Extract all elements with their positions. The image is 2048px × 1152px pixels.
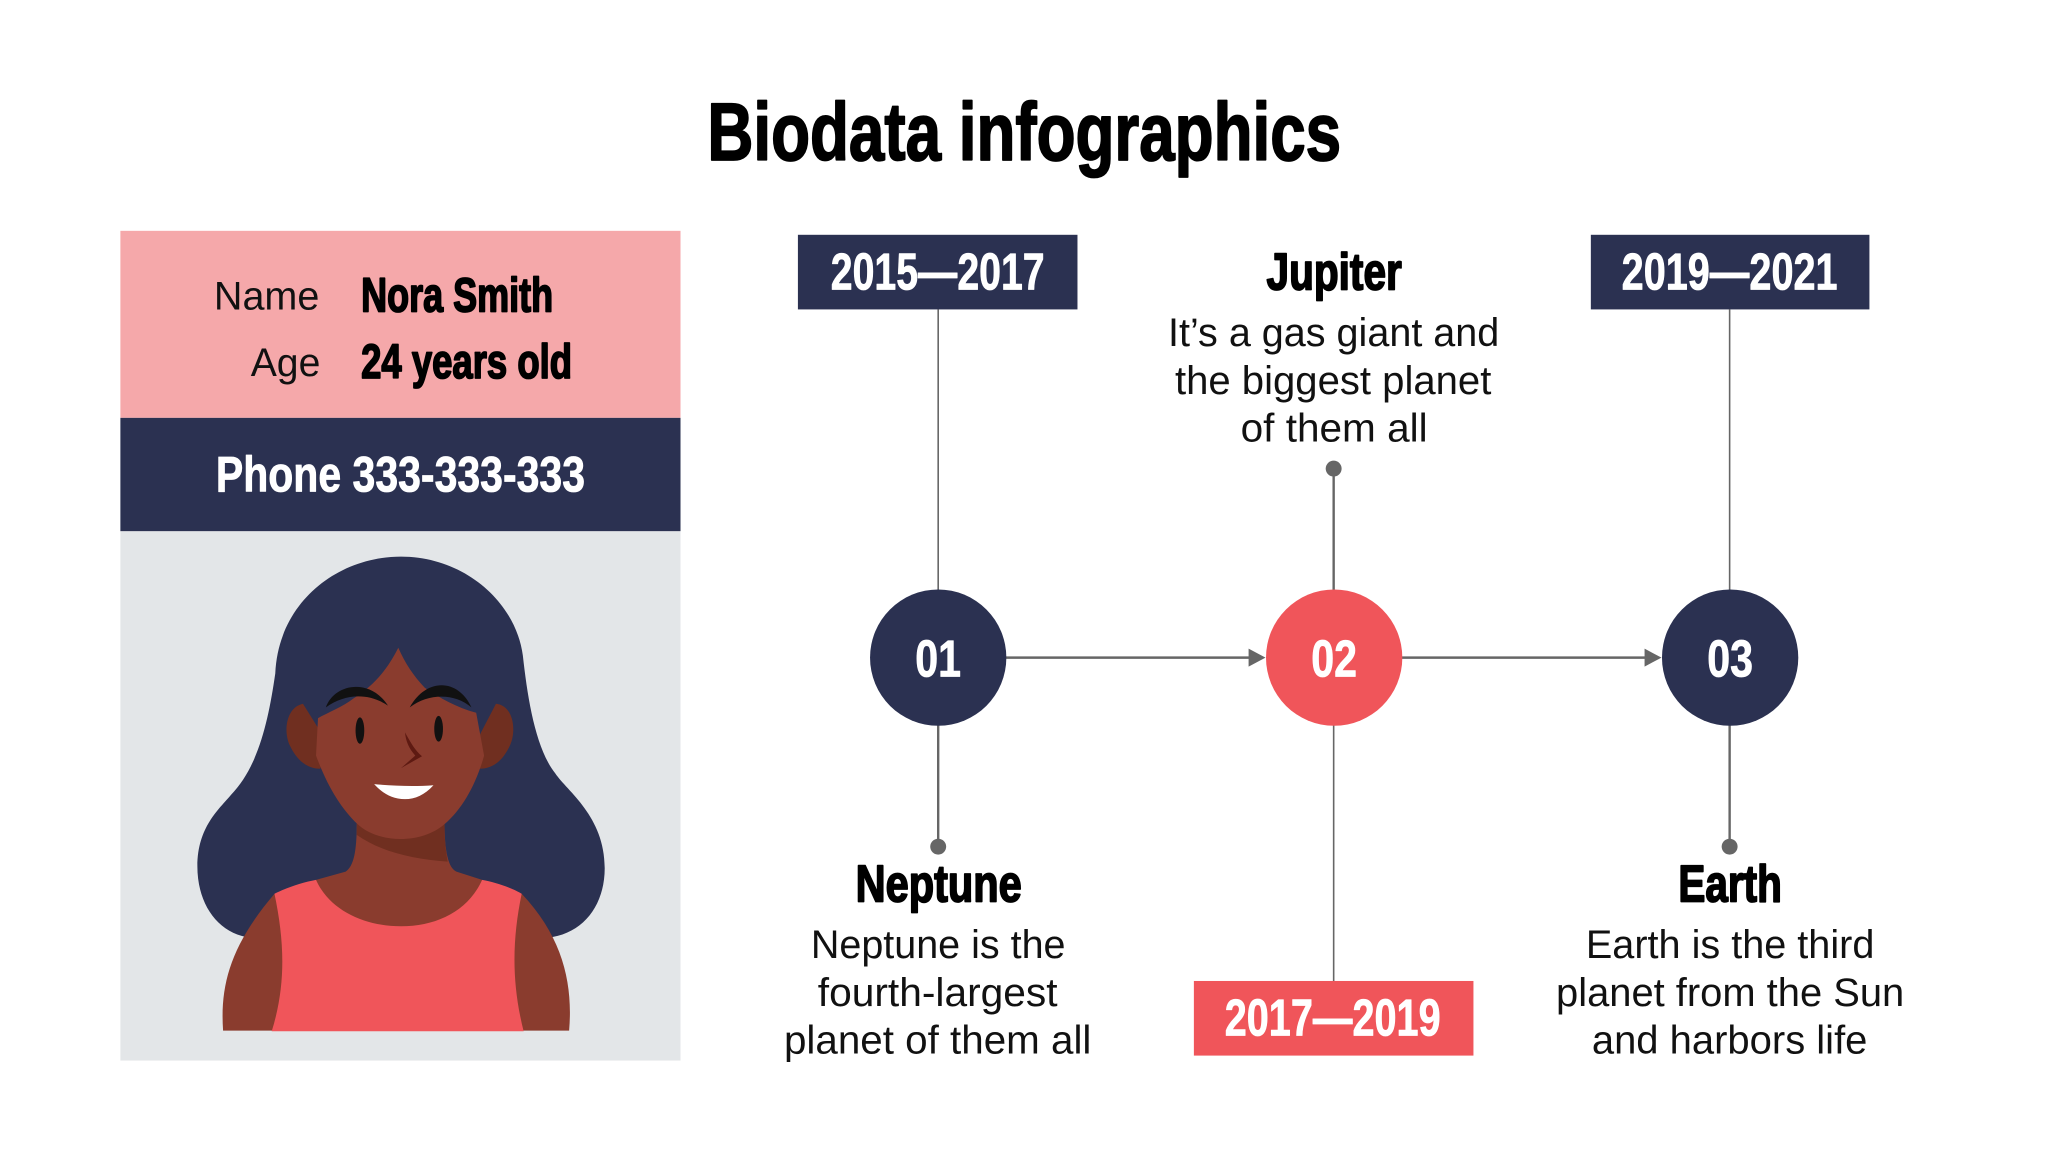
value: name: Nora Smith: [361, 269, 553, 322]
arrow: 02 to 03: [1401, 649, 1661, 667]
description: Jupiter: It’s a gas giant and: [1168, 311, 1499, 355]
panel: profile card: [120, 231, 681, 1061]
description: Earth: planet from the Sun: [1556, 971, 1904, 1015]
node 02: [1266, 589, 1402, 726]
ears: [286, 704, 513, 769]
text block: Earth: [1556, 854, 1904, 1063]
neck shadow: [357, 823, 448, 862]
description: Neptune: Neptune is the: [811, 923, 1066, 967]
shirt: [272, 880, 524, 1031]
node 03: 03: [1707, 630, 1753, 688]
description: Neptune: planet of them all: [784, 1019, 1091, 1063]
smile: [374, 784, 433, 799]
arrow: 01 to 02: [1006, 649, 1266, 667]
heading: Earth: Earth: [1678, 854, 1782, 912]
face: [316, 648, 484, 839]
heading: Neptune: Neptune: [856, 854, 1022, 912]
description: Jupiter: [1168, 311, 1499, 451]
eyes: [356, 717, 364, 744]
description: Neptune: [784, 923, 1091, 1063]
date box: 2015-2017: 2015—2017: [831, 243, 1045, 301]
panel: name and age: [120, 231, 681, 418]
arms and chest: [223, 823, 570, 1031]
node 03: [1662, 589, 1798, 726]
hair: [197, 557, 605, 938]
dot: Earth: [1722, 839, 1738, 855]
panel: phone: Phone 333-333-333: [216, 446, 585, 502]
description: Neptune: fourth-largest: [818, 971, 1058, 1015]
node 01: [870, 589, 1006, 726]
heading: Jupiter: Jupiter: [1267, 243, 1402, 301]
right eye: [434, 716, 443, 742]
dot: Neptune: [930, 839, 946, 855]
date box: 2019-2021: 2019—2021: [1622, 243, 1838, 301]
date box: 2017-2019: [1194, 981, 1473, 1056]
description: Earth: [1556, 923, 1904, 1063]
node 01: 01: [915, 630, 961, 688]
date box: 2019-2021: [1591, 235, 1869, 309]
value: age: 24 years old: [361, 336, 572, 389]
description: Jupiter: of them all: [1241, 407, 1428, 451]
panel: phone: [120, 418, 681, 531]
nose: [401, 732, 422, 768]
description: Jupiter: the biggest planet: [1175, 359, 1491, 403]
eyebrows: [326, 685, 471, 707]
text block: Neptune: [784, 854, 1091, 1063]
date box: 2017-2019: 2017—2019: [1225, 989, 1441, 1047]
description: Earth: Earth is the third: [1586, 923, 1874, 967]
panel: portrait background: [120, 531, 681, 1061]
title: Biodata infographics: [707, 87, 1341, 178]
label: age: Age: [251, 341, 320, 385]
text block: Jupiter: [1168, 243, 1499, 451]
node 02: 02: [1311, 630, 1357, 688]
date box: 2015-2017: [798, 235, 1077, 309]
label: name: Name: [214, 274, 319, 318]
connector lines: [938, 309, 1730, 981]
description: Earth: and harbors life: [1592, 1019, 1867, 1063]
illustration: woman portrait: [197, 557, 605, 1031]
dot: Jupiter: [1326, 461, 1342, 477]
